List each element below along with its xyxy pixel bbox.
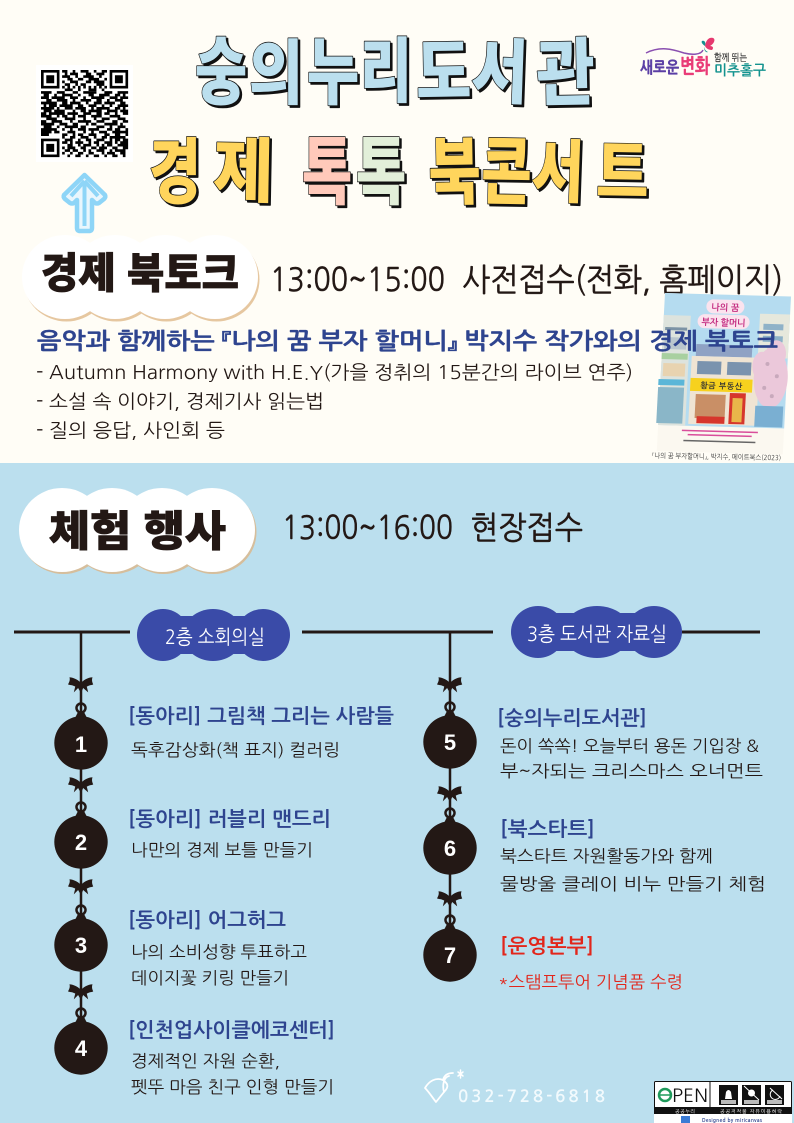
schedule: hands-on time xyxy=(282,512,583,544)
book cover: 나의 꿈 xyxy=(711,302,740,313)
list: book talk program xyxy=(36,363,633,440)
program 4: 펫뚜 마음 친구 인형 만들기 xyxy=(131,1078,334,1096)
program 4 xyxy=(128,1019,335,1096)
list: book talk program: - Autumn Harmony with H.E.Y(가을 정취의 15분간의 라이브 연주) xyxy=(36,363,633,382)
program 6: [북스타트] xyxy=(500,818,595,839)
cloud: hands-on events xyxy=(19,488,256,574)
program 4: [인천업사이클에코센터] xyxy=(128,1019,335,1040)
title: book concert: 제 xyxy=(212,114,275,217)
logo: Michuhol-gu: 변화 xyxy=(680,56,710,76)
title: library name: 숭 xyxy=(195,13,247,119)
ornament 5: 5 xyxy=(444,730,456,755)
ornament 4 xyxy=(54,984,108,1075)
title: library name: 리 xyxy=(360,16,412,117)
book cover: 황금 부동산 xyxy=(700,381,743,391)
title: library name: 관 xyxy=(535,13,596,121)
program 7: *스탬프투어 기념품 수령 xyxy=(498,973,683,991)
program 5: [숭의누리도서관] xyxy=(497,707,647,728)
title: library name xyxy=(195,13,596,121)
program 3 xyxy=(128,909,307,987)
logo: Michuhol-gu: 함께 뛰는 xyxy=(714,52,747,63)
ornament 6 xyxy=(423,786,477,875)
program 7 xyxy=(498,935,683,991)
program 1: 독후감상화(책 표지) 컬러링 xyxy=(131,741,340,759)
license: open type xyxy=(654,1081,792,1123)
program 5: 부~자되는 크리스마스 오너먼트 xyxy=(500,762,763,780)
ornament 1: 1 xyxy=(75,732,87,757)
program 2: 나만의 경제 보틀 만들기 xyxy=(131,841,313,859)
ornament 4: 4 xyxy=(75,1036,88,1061)
logo: Michuhol-gu xyxy=(640,38,766,78)
program 4: 경제적인 자원 순환, xyxy=(131,1052,280,1070)
title: book concert: 톡 xyxy=(356,113,406,220)
ornament 2 xyxy=(54,777,108,869)
subheading: book talk title: 음악과 함께하는 『나의 꿈 부자 할머니』 박지수 작가와의 경제 북토크 xyxy=(37,329,778,353)
program 1 xyxy=(128,705,394,759)
cloud: economy book talk xyxy=(22,235,260,322)
badge: 2nd floor xyxy=(137,609,290,661)
ornament 3 xyxy=(54,879,108,972)
program 6 xyxy=(500,818,766,893)
list: book talk program: - 소설 속 이야기, 경제기사 읽는법 xyxy=(36,392,324,411)
title: book concert: 콘 xyxy=(480,113,533,220)
book cover: 부자 할머니 xyxy=(701,317,746,328)
program 3: [동아리] 어그허그 xyxy=(128,909,286,930)
license: open type: 공공저작물 자유이용허락 xyxy=(720,1108,782,1114)
ornament 6: 6 xyxy=(444,836,456,861)
program 7: [운영본부] xyxy=(500,935,594,956)
schedule: book talk time xyxy=(270,264,783,296)
heading: hands-on events: 체험 행사 xyxy=(49,498,226,559)
title: book concert: 톡 xyxy=(302,113,352,220)
ornament 7: 7 xyxy=(444,943,456,968)
program 6: 물방울 클레이 비누 만들기 체험 xyxy=(500,875,766,893)
program 2 xyxy=(128,808,331,859)
ornament 3: 3 xyxy=(75,933,87,958)
program 2: [동아리] 러블리 맨드리 xyxy=(128,808,331,829)
program 5: 돈이 쏙쏙! 오늘부터 용돈 기입장 & xyxy=(500,737,759,755)
title: book concert: 북 xyxy=(427,113,482,220)
license: open type: Designed by miricanvas xyxy=(702,1118,762,1123)
schedule: book talk time: 13:00~15:00 xyxy=(270,264,445,296)
program 3: 데이지꽃 키링 만들기 xyxy=(131,969,289,987)
title: book concert: 경 xyxy=(149,114,201,219)
book cover xyxy=(652,293,792,462)
program 3: 나의 소비성향 투표하고 xyxy=(131,943,307,961)
title: library name: 도 xyxy=(415,15,472,118)
program 5 xyxy=(497,707,763,780)
title: library name: 의 xyxy=(249,17,303,119)
heading: economy book talk: 경제 북토크 xyxy=(41,240,239,301)
license: open type: 공공누리 xyxy=(675,1108,695,1114)
logo: Michuhol-gu: 미추홀구 xyxy=(714,63,766,78)
phone number: 032-728-6818 xyxy=(458,1088,605,1105)
title: book concert xyxy=(149,113,650,220)
program 6: 북스타트 자원활동가와 함께 xyxy=(500,847,713,865)
badge: 3rd floor xyxy=(511,606,682,658)
timeline rails xyxy=(14,632,760,1020)
logo: Michuhol-gu: 새로운 xyxy=(640,59,679,76)
title: library name: 서 xyxy=(470,15,530,119)
list: book talk program: - 질의 응답, 사인회 등 xyxy=(36,421,225,440)
ornament 2: 2 xyxy=(75,830,87,855)
ornament 7 xyxy=(423,891,477,982)
schedule: hands-on time: 13:00~16:00 xyxy=(282,512,453,544)
book caption: 『나의 꿈 부자할머니』, 박지수, 메이트북스(2023) xyxy=(652,452,781,462)
program 1: [동아리] 그림책 그리는 사람들 xyxy=(128,705,394,726)
title: book concert: 서 xyxy=(530,117,586,218)
QR code xyxy=(36,65,133,162)
icon: phone book xyxy=(425,1070,463,1102)
lower panel background xyxy=(0,463,794,1123)
icon: up arrow xyxy=(64,175,105,231)
badge: 3rd floor: 3층 도서관 자료실 xyxy=(527,624,667,644)
title: book concert: 트 xyxy=(595,118,650,216)
ornament 1 xyxy=(54,677,108,770)
badge: 2nd floor: 2층 소회의실 xyxy=(165,627,265,647)
schedule: hands-on time: 현장접수 xyxy=(470,512,583,544)
title: library name: 누 xyxy=(307,13,359,119)
license: open type: PEN xyxy=(672,1087,708,1105)
ornament 5 xyxy=(423,677,477,769)
